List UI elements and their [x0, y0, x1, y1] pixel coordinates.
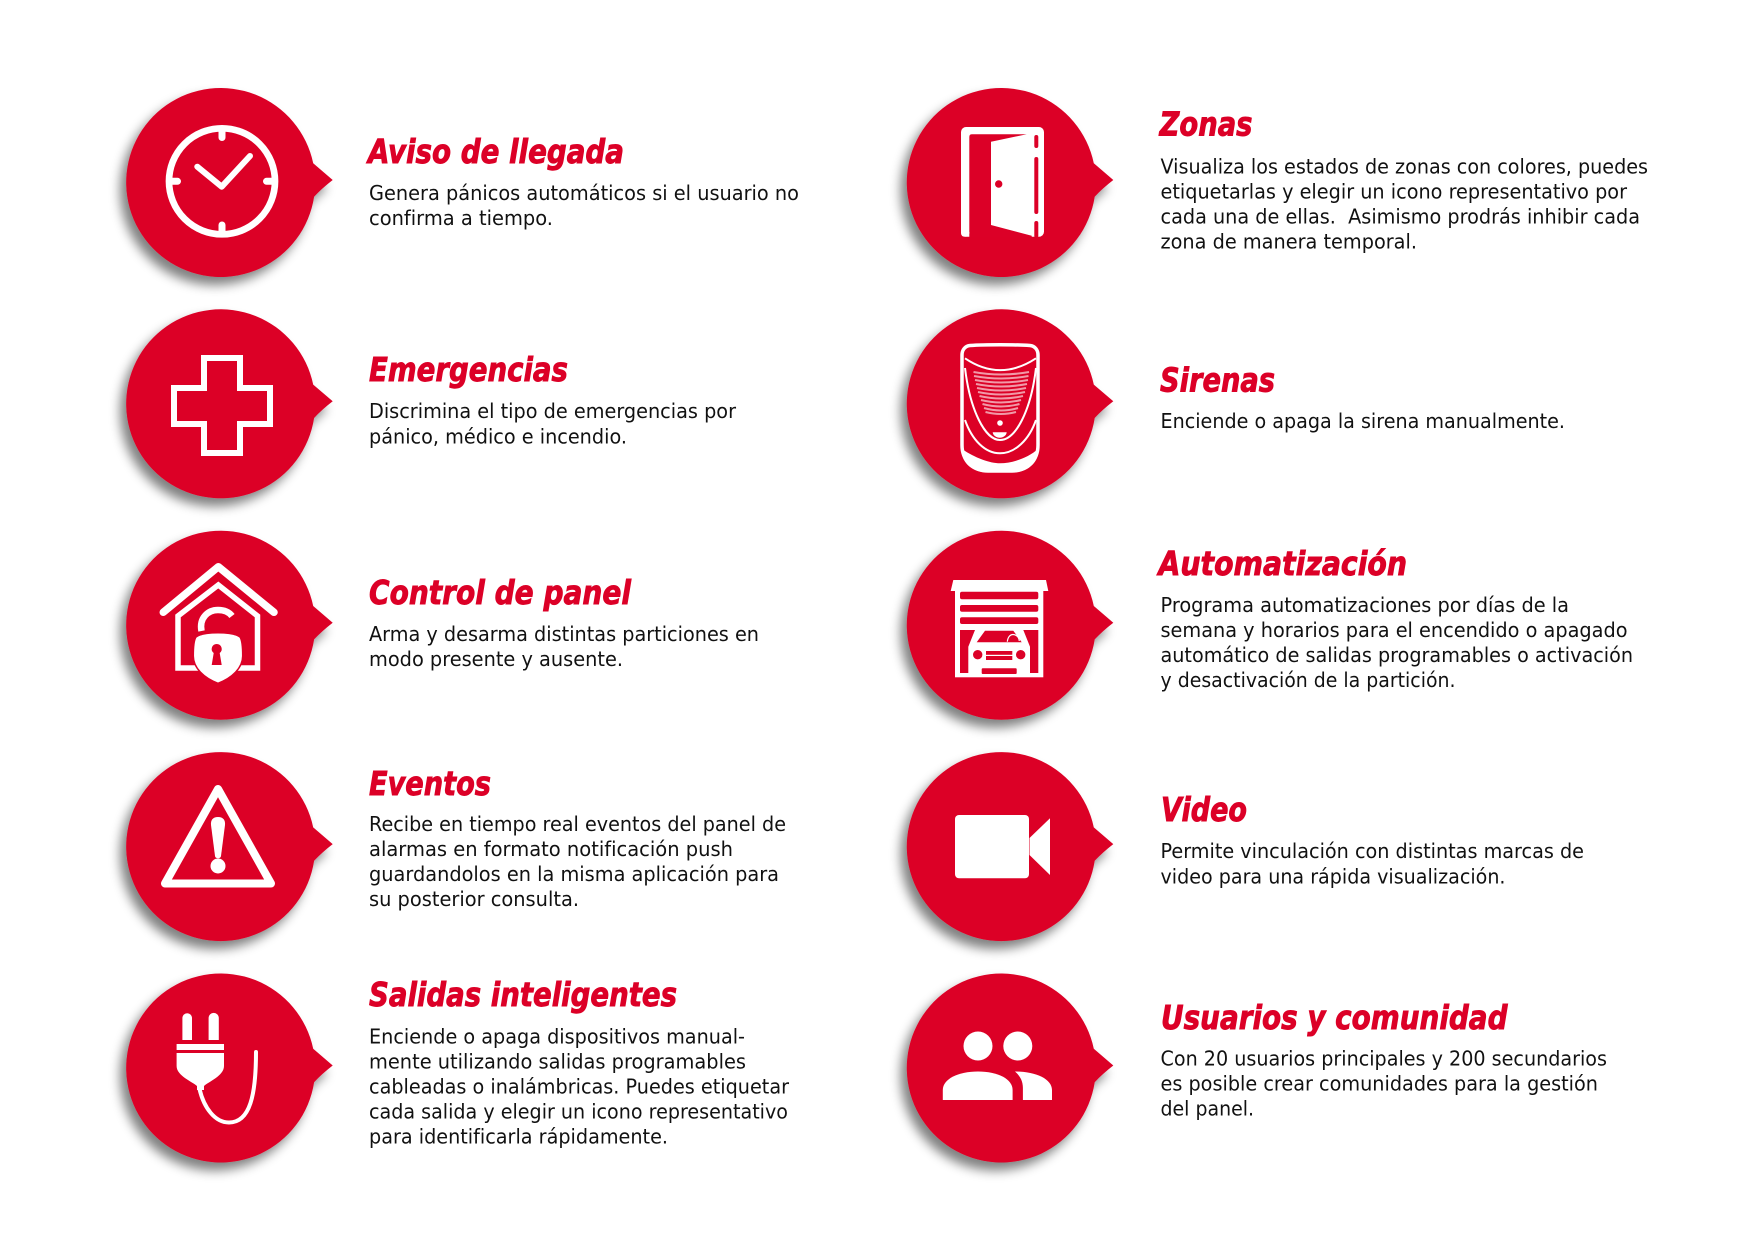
description: para identificarla rápidamente.: [369, 1124, 668, 1148]
speech bubble: [126, 88, 333, 277]
panel: Usuarios y comunidad: [907, 974, 1607, 1163]
icon: medical cross: [174, 358, 270, 453]
description: [369, 622, 759, 671]
description: alarmas en formato notificación push: [369, 837, 733, 861]
description: [369, 812, 786, 911]
description: Permite vinculación con distintas marcas de: [1160, 839, 1584, 863]
description: Enciende o apaga la sirena manualmente.: [1160, 409, 1565, 433]
description: Recibe en tiempo real eventos del panel de: [369, 812, 786, 836]
description: cada una de ellas. Asimismo prodrás inhibir cada: [1160, 204, 1640, 228]
speech bubble: [126, 531, 333, 720]
heading: Eventos: [369, 764, 491, 803]
heading: Automatización: [1156, 544, 1407, 583]
speech bubble: [126, 309, 333, 498]
description: y desactivación de la partición.: [1160, 668, 1456, 692]
description: [369, 1024, 790, 1148]
icon: users: [943, 1032, 1052, 1100]
panel: Video: [907, 752, 1584, 941]
icon: house with lock: [163, 567, 274, 683]
heading: Control de panel: [369, 573, 632, 612]
icon: clock: [169, 128, 275, 234]
speech bubble: [126, 974, 333, 1163]
panel: Control de panel: [126, 531, 759, 720]
description: zona de manera temporal.: [1160, 229, 1417, 253]
panel: Eventos: [126, 752, 786, 941]
heading: Salidas inteligentes: [369, 975, 677, 1014]
heading: Sirenas: [1160, 361, 1275, 400]
description: su posterior consulta.: [369, 887, 579, 911]
description: [369, 181, 799, 230]
description: Visualiza los estados de zonas con colores, puedes: [1160, 154, 1648, 178]
description: del panel.: [1160, 1096, 1254, 1120]
description: [1160, 1046, 1607, 1120]
description: etiquetarlas y elegir un icono representativo por: [1160, 179, 1628, 203]
icon: garage with car: [951, 580, 1048, 677]
description: es posible crear comunidades para la gestión: [1160, 1071, 1598, 1095]
heading: Zonas: [1159, 105, 1252, 144]
icon: warning triangle: [165, 789, 271, 884]
panel: Automatización: [907, 531, 1633, 720]
description: Con 20 usuarios principales y 200 secundarios: [1160, 1046, 1607, 1070]
heading: Aviso de llegada: [365, 132, 624, 171]
description: [1160, 593, 1633, 692]
panel: Emergencias: [126, 309, 737, 498]
heading: Video: [1161, 790, 1247, 829]
description: [369, 399, 737, 448]
description: Discrimina el tipo de emergencias por: [369, 399, 737, 423]
description: pánico, médico e incendio.: [369, 424, 627, 448]
description: Genera pánicos automáticos si el usuario no: [369, 181, 799, 205]
description: cada salida y elegir un icono representativo: [369, 1099, 788, 1123]
speech bubble: [907, 531, 1113, 720]
heading: Emergencias: [369, 350, 568, 389]
speech bubble: [907, 88, 1113, 277]
description: confirma a tiempo.: [369, 206, 553, 230]
icon: plug: [177, 1013, 256, 1122]
description: guardandolos en la misma aplicación para: [369, 862, 779, 886]
description: video para una rápida visualización.: [1160, 864, 1506, 888]
description: modo presente y ausente.: [369, 647, 623, 671]
description: semana y horarios para el encendido o apagado: [1160, 618, 1628, 642]
description: mente utilizando salidas programables: [369, 1049, 746, 1073]
description: automático de salidas programables o activación: [1160, 643, 1633, 667]
description: Enciende o apaga dispositivos manual-: [369, 1024, 745, 1048]
icon: video camera: [955, 815, 1050, 878]
description: Arma y desarma distintas particiones en: [369, 622, 759, 646]
description: [1160, 839, 1584, 888]
description: [1160, 154, 1648, 253]
heading: Usuarios y comunidad: [1161, 998, 1508, 1037]
panel: Salidas inteligentes: [126, 974, 790, 1163]
panel: Aviso de llegada: [126, 88, 799, 277]
speech bubble: [907, 974, 1113, 1163]
panel: Zonas: [907, 88, 1648, 277]
speech bubble: [907, 752, 1113, 941]
speech bubble: [126, 752, 333, 941]
description: cableadas o inalámbricas. Puedes etiquetar: [369, 1074, 790, 1098]
speech bubble: [907, 309, 1113, 498]
icon: siren: [962, 345, 1038, 473]
panel: Sirenas: [907, 309, 1565, 498]
icon: door: [961, 127, 1044, 238]
description: Programa automatizaciones por días de la: [1160, 593, 1569, 617]
